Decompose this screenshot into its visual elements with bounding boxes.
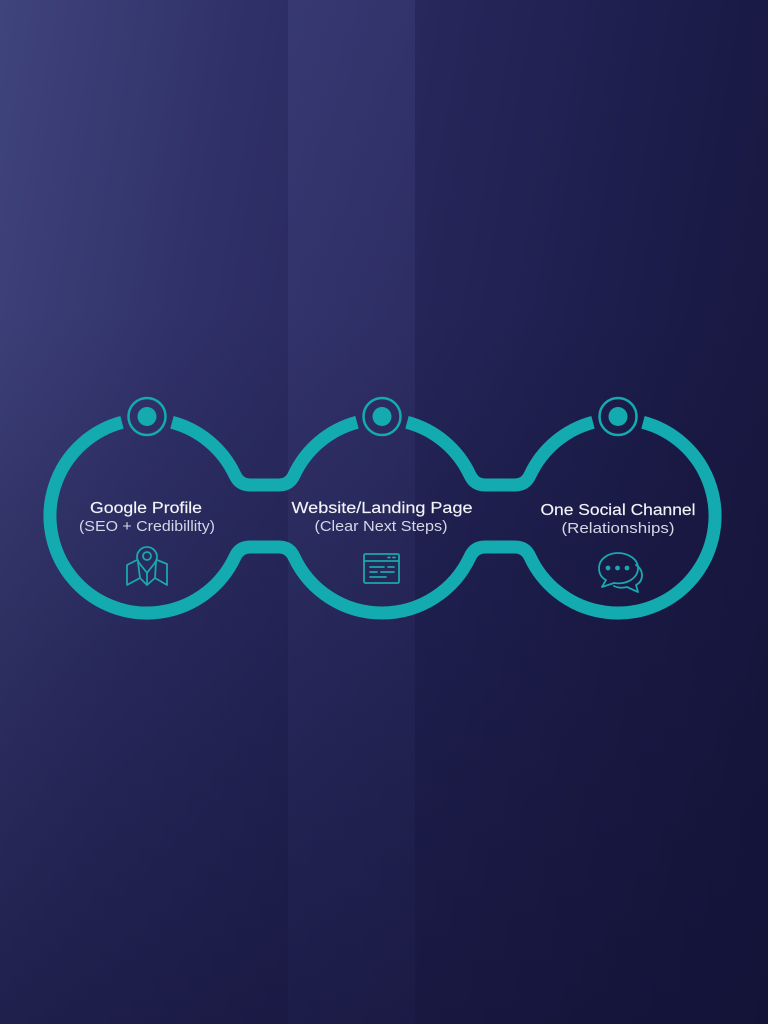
node marker 2	[364, 398, 400, 435]
label: Google Profile	[79, 500, 215, 535]
background vertical light band	[288, 0, 415, 1024]
connected three-circle teal outline	[50, 422, 715, 613]
label: One Social Channel: (Relationships)	[562, 520, 674, 537]
icon: map with pin	[127, 547, 167, 585]
icon: browser window	[364, 554, 399, 583]
node marker 3	[600, 398, 636, 435]
node marker 1	[128, 398, 166, 435]
label: One Social Channel: One Social Channel	[540, 502, 696, 519]
label: Website/Landing Page: Website/Landing Page	[292, 500, 473, 517]
label: Website/Landing Page	[292, 500, 473, 535]
label: Website/Landing Page: (Clear Next Steps)	[314, 518, 448, 535]
icon: chat bubbles	[599, 553, 642, 592]
label: One Social Channel	[540, 502, 696, 537]
label: Google Profile: (SEO + Credibillity)	[79, 518, 215, 535]
label: Google Profile: Google Profile	[90, 500, 202, 517]
